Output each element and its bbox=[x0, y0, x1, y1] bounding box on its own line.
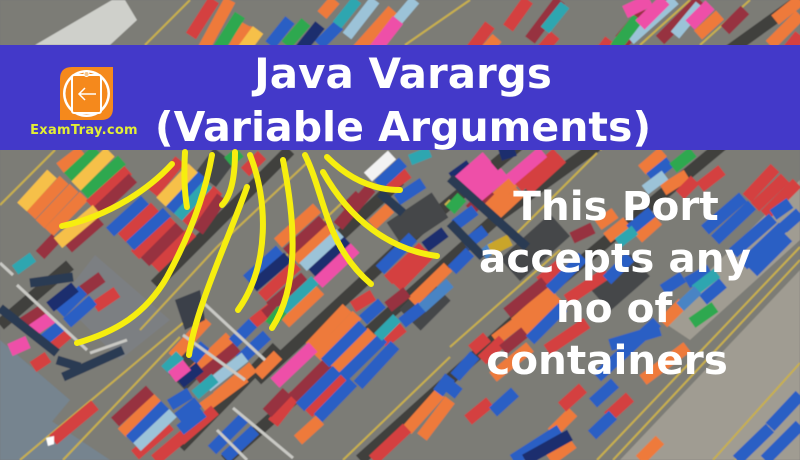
white and misc bbox=[368, 155, 392, 177]
logo wordmark: ExamTray.com bbox=[30, 123, 138, 138]
yellow strokes: port lines converging on the banner bbox=[62, 152, 437, 355]
containers: navy bbox=[50, 25, 570, 460]
title: Java Varargs bbox=[251, 49, 552, 98]
containers: pink bbox=[10, 0, 710, 383]
logo: ExamTray bbox=[30, 67, 138, 138]
cranes bbox=[0, 263, 293, 460]
banner bbox=[0, 45, 800, 150]
callout: port caption: containers bbox=[486, 336, 728, 384]
containers: yellow bbox=[22, 30, 258, 243]
callout: port caption: accepts any bbox=[479, 234, 751, 282]
title bbox=[155, 49, 651, 151]
ground tones bbox=[0, 340, 110, 460]
icon: orange clipboard with back arrow bbox=[60, 67, 113, 120]
callout: port caption: This Port bbox=[513, 182, 719, 230]
containers: green bbox=[68, 15, 715, 325]
callout: port caption: no of bbox=[556, 284, 672, 332]
containers: light and teal bbox=[137, 0, 700, 447]
callout: port caption bbox=[479, 182, 751, 384]
white warehouse bbox=[35, 0, 137, 45]
title: (Variable Arguments) bbox=[155, 103, 651, 151]
